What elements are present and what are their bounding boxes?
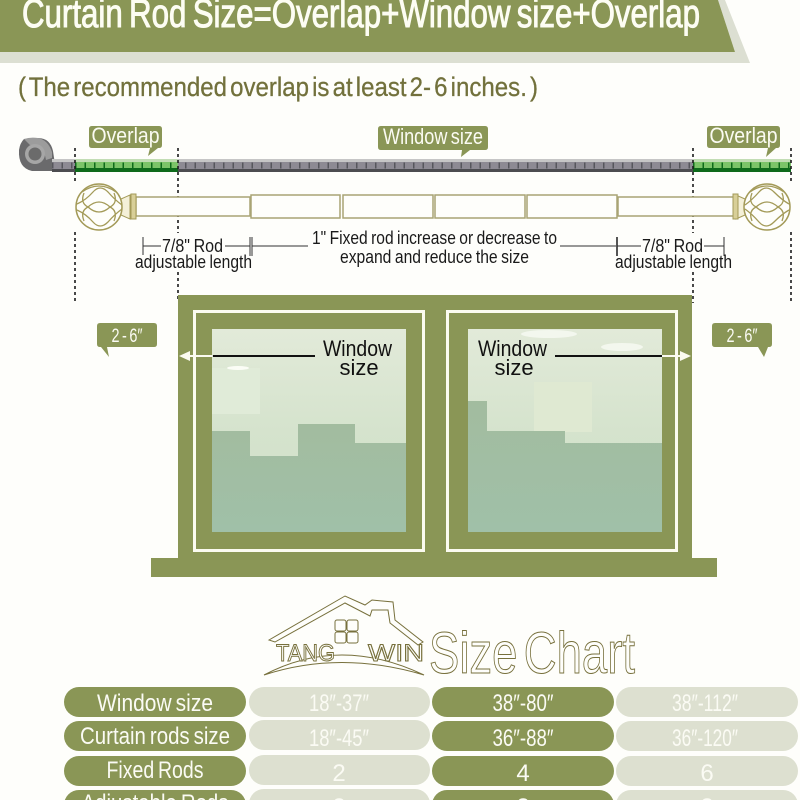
measurement: right adjustable length [615,236,732,272]
icon: right finial [733,184,790,230]
callout: right 2-6 inches [712,323,772,357]
row: window size: 18″-37″ [309,690,369,717]
right pane [448,312,676,550]
callout: left overlap [89,123,162,156]
row: window size: 38″-112″ [672,690,738,717]
callout: left 2-6 inches: 2 - 6″ [112,326,143,347]
callout: right 2-6 inches: 2 - 6″ [726,326,758,347]
subtitle: ( The recommended overlap is at least 2- 6 inches. ) [18,72,538,102]
icon: left finial [76,184,136,230]
right arrow and window size label: Window [478,336,547,361]
row: curtain rods size: 36″-120″ [672,725,738,752]
row: fixed rods: 2 [332,760,346,787]
measurement: right adjustable length: adjustable length [615,252,732,272]
measurement: left adjustable length: adjustable length [135,252,252,272]
logo: Tang Win house: WIN [368,640,424,667]
callout: window size: Window size [383,124,483,149]
logo: Tang Win house [264,596,424,675]
left overlap green section [75,159,178,172]
left arrow and window size label: size [339,355,379,380]
measurement: fixed rod note: expand and reduce the size [340,247,529,267]
row: curtain rods size: Curtain rods size [80,723,230,750]
row: fixed rods: Fixed Rods [106,757,204,784]
tape bar [52,159,693,172]
icon: window in roof [335,620,358,643]
callout: window size [378,124,488,157]
fixed rod segments [251,195,617,218]
row: fixed rods [64,755,798,787]
row: fixed rods: 4 [516,760,530,787]
row: adjustable rods [64,789,798,800]
measurement: fixed rod note: 1" Fixed rod increase or decrease to [312,228,557,248]
row: fixed rods: 6 [700,760,714,787]
window illustration [151,295,717,577]
left arrow and window size label: Window [323,336,392,361]
icon: tape measure end [19,138,56,171]
window sill [151,558,717,577]
measurement: left adjustable length: 7/8" Rod [162,236,223,256]
measurement: fixed rod note [252,228,617,267]
row: curtain rods size: 36″-88″ [492,725,554,752]
row: curtain rods size [64,720,798,752]
callout: right overlap [707,123,780,157]
size chart table [64,687,798,800]
right arrow and window size label: size [494,355,534,380]
measuring rod diagram [19,138,791,172]
title banner [0,0,750,63]
window frame [178,295,692,560]
measurement: left adjustable length [135,236,252,272]
logo: Tang Win house: TANG [276,640,335,667]
right arrow and window size label [478,336,691,380]
row: window size: 38″-80″ [492,690,554,717]
heading: size chart: Size Chart [429,621,635,686]
right adjustable rod [618,197,734,216]
curtain rod [76,184,790,230]
callout: left 2-6 inches [97,323,157,357]
right overlap green section [693,159,791,172]
left adjustable rod [136,197,250,216]
callout: left overlap: Overlap [92,123,160,148]
row: window size [64,687,798,717]
measurement: right adjustable length: 7/8" Rod [642,236,703,256]
left pane [194,312,424,550]
row: curtain rods size: 18″-45″ [309,725,369,752]
row: window size: Window size [97,690,213,717]
callout: right overlap: Overlap [710,123,778,148]
left arrow and window size label [179,336,392,380]
